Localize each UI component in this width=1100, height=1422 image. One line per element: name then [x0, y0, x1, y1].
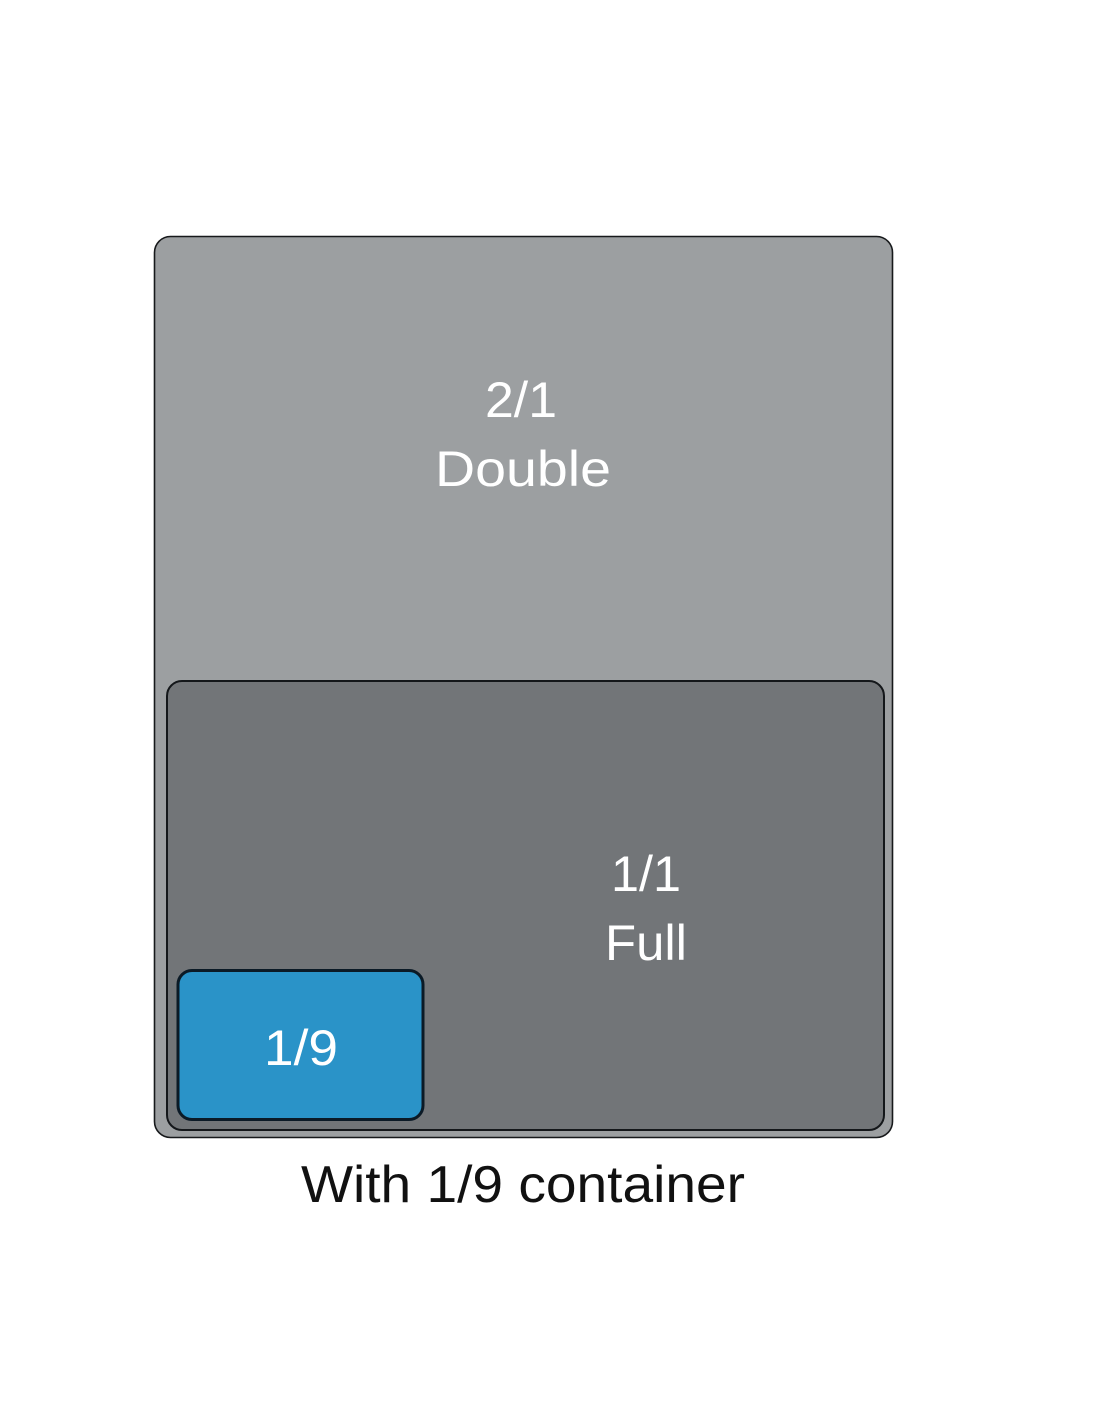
label: 2/1 Double [435, 372, 611, 497]
panel: 1/9 container [178, 970, 423, 1120]
panel: 1/1 full container [167, 681, 884, 1130]
label: 2/1 Double: 2/1 [485, 372, 557, 428]
label: 1/1 Full: Full [605, 915, 687, 971]
label: 1/9: 1/9 [264, 1020, 338, 1076]
label: 2/1 Double: Double [435, 441, 611, 497]
caption: With 1/9 container [301, 1156, 745, 1214]
panel: 2/1 double container [154, 236, 892, 1138]
label: 1/1 Full: 1/1 [611, 846, 681, 902]
label: 1/1 Full [605, 846, 687, 971]
